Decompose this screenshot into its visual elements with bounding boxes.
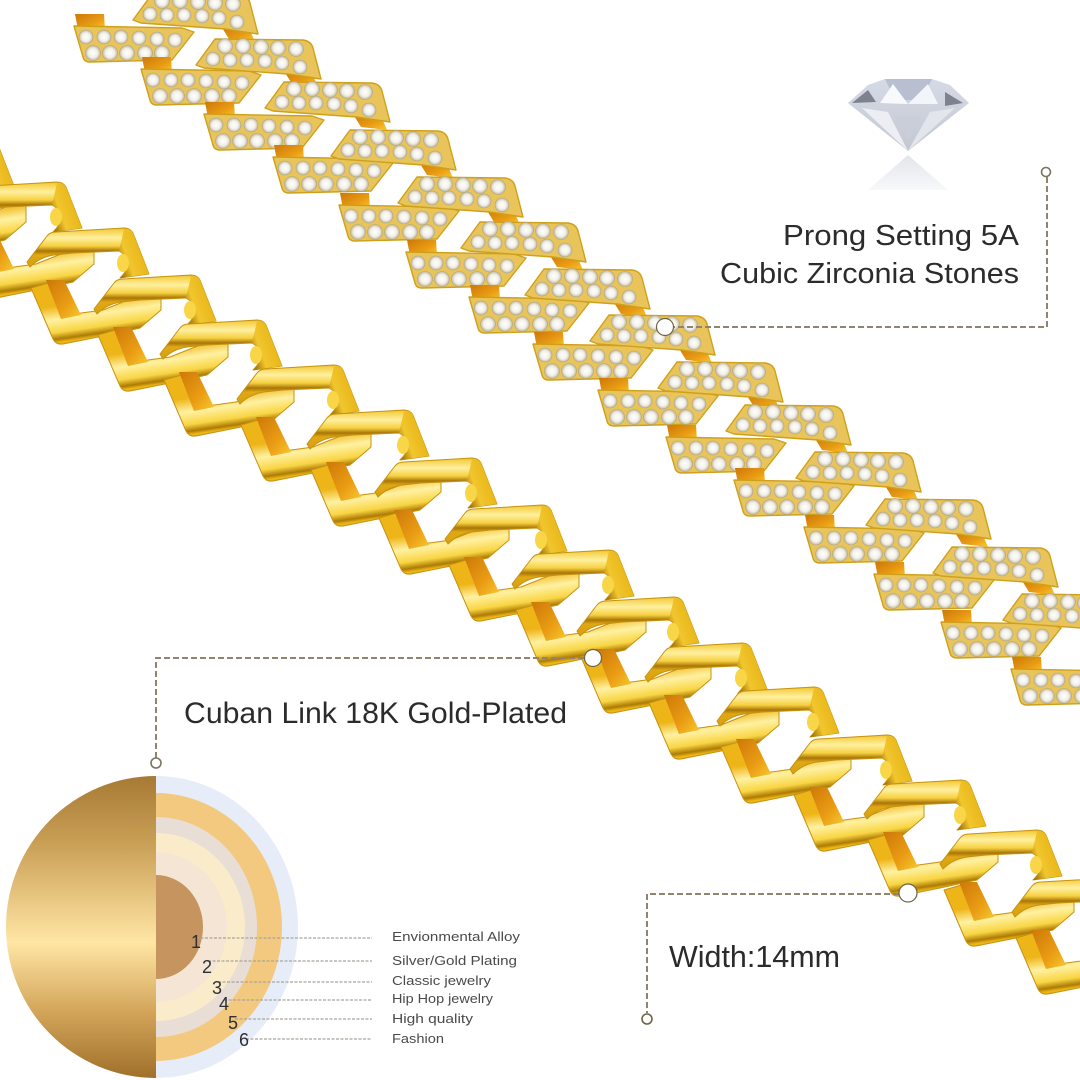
- layer labels: Envionmental Alloy: [392, 929, 521, 944]
- heading: stones: Cubic Zirconia Stones: [720, 258, 1019, 290]
- callout: gold plating connector: [151, 650, 602, 768]
- layer labels: High quality: [392, 1011, 474, 1026]
- icon: diamond with reflection: [848, 79, 969, 201]
- plain gold chain: [0, 140, 1080, 994]
- layer labels: [392, 929, 521, 1046]
- layer numbers: [191, 932, 249, 1050]
- callout: width connector: [642, 884, 917, 1024]
- heading: gold plated: Cuban Link 18K Gold-Plated: [184, 697, 567, 730]
- callout: stones connector: [656, 168, 1050, 336]
- layer diagram: [6, 776, 521, 1078]
- leader lines: [196, 938, 372, 1039]
- heading: stones: [720, 220, 1020, 290]
- heading: stones: Prong Setting 5A: [783, 220, 1020, 252]
- layer labels: Classic jewelry: [392, 973, 492, 988]
- diamond-set chain: [66, 0, 1080, 705]
- layer numbers: 1: [191, 932, 201, 952]
- layer numbers: 4: [219, 994, 229, 1014]
- layer labels: Hip Hop jewelry: [392, 991, 494, 1006]
- cross-section rings: [156, 776, 298, 1078]
- layer numbers: 3: [212, 978, 222, 998]
- layer numbers: 5: [228, 1013, 238, 1033]
- sphere half: [6, 776, 156, 1078]
- layer numbers: 6: [239, 1030, 249, 1050]
- layer labels: Silver/Gold Plating: [392, 953, 517, 968]
- layer numbers: 2: [202, 957, 212, 977]
- heading: width: Width:14mm: [669, 939, 840, 974]
- layer labels: Fashion: [392, 1031, 444, 1046]
